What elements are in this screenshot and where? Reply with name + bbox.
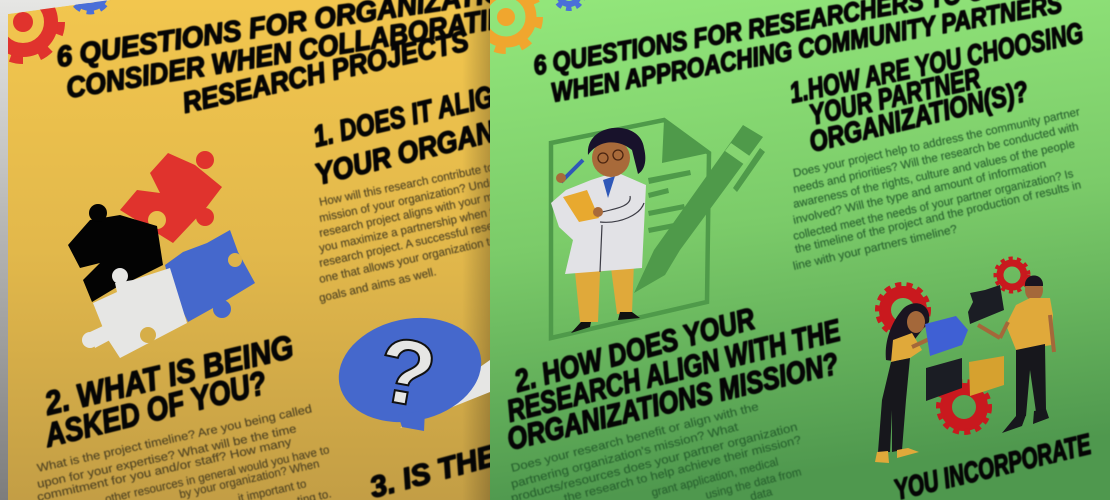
icon: blue gear xyxy=(71,0,109,11)
woman xyxy=(875,303,938,463)
text block: question 2: grant application, medical xyxy=(650,456,780,499)
heading: question 1 xyxy=(314,85,490,186)
puzzle: blue xyxy=(925,316,968,356)
text block: question 1 xyxy=(318,164,490,304)
text block: question 1: one that allows your organization to meet its own xyxy=(318,220,563,286)
puzzle piece: black xyxy=(68,204,163,302)
text block: question 1: collected meet the needs of your partner organization? Is xyxy=(792,168,1075,243)
illustration: people with gears and puzzle pieces xyxy=(875,259,1054,463)
icon: blue gear xyxy=(556,0,582,7)
text block: question 1: research project aligns with your mission, and how xyxy=(318,175,573,240)
heading: question 2: 2. HOW DOES YOUR xyxy=(510,301,759,399)
panel: researchers poster xyxy=(473,0,1110,500)
puzzle piece: red xyxy=(120,151,222,243)
illustration: scientist xyxy=(551,128,646,333)
heading: question 1: YOUR PARTNER xyxy=(807,63,983,132)
heading: question 2: RESEARCH ALIGN WITH THE xyxy=(503,312,845,429)
puzzle piece: blue xyxy=(158,230,255,322)
pencil xyxy=(561,160,583,182)
text block: question 1: needs and priorities? Will the research be conducted with xyxy=(792,121,1080,196)
text block: question 1: awareness of the rights, culture and values of the people xyxy=(792,138,1076,211)
text block: question 2: partnering organization's mission? What xyxy=(510,421,740,491)
puzzle: black lower xyxy=(926,358,962,401)
gear: bottom xyxy=(939,382,989,432)
heading: question 2: 2. WHAT IS BEING xyxy=(40,328,297,422)
icon: speech bubble with question mark xyxy=(338,318,490,431)
writing hand xyxy=(593,207,603,217)
gear: left xyxy=(878,285,928,335)
text block: question 1: How will this research contribute to the goals and xyxy=(318,147,566,209)
text block: question 2: by your organization? When xyxy=(178,458,321,500)
puzzle piece: white xyxy=(82,268,187,358)
title: RESEARCH PROJECTS xyxy=(180,25,472,120)
icon: puzzle pieces xyxy=(68,151,255,358)
text block: question 1: Does your project help to address the community partner xyxy=(792,106,1081,180)
text block: question 1: involved? Will the type and amount of information xyxy=(792,158,1047,227)
head xyxy=(592,139,630,177)
text block: question 1: mission of your organization? Understand how this xyxy=(318,160,573,225)
text block: question 1 xyxy=(792,106,1082,273)
text block: question 2: Does your research benefit or align with the xyxy=(510,401,760,475)
heading: question 2: ASKED OF YOU? xyxy=(40,364,270,454)
coat seam xyxy=(600,196,644,272)
lab coat xyxy=(551,172,646,274)
heading: question 1: ORGANIZATION(S)? xyxy=(806,76,1032,159)
heading: question 1 xyxy=(787,17,1086,159)
text block: question 2 xyxy=(510,401,803,500)
heading: question 2: ORGANIZATIONS MISSION? xyxy=(504,346,842,457)
text block: question 1: research project. A successful research project is xyxy=(318,205,564,270)
puzzle: black top xyxy=(968,285,1004,324)
panel: organizations poster xyxy=(8,0,490,500)
heading: question 1: 1. DOES IT ALIGN WITH xyxy=(310,61,580,154)
shoes xyxy=(571,322,591,333)
gear: top xyxy=(996,259,1028,291)
icon: orange gear xyxy=(490,0,543,54)
text block: question 1: you maximize a partnership when taking on a xyxy=(318,195,547,255)
text block: question 1: the timeline of the project and the production of results in xyxy=(794,179,1082,256)
clipboard xyxy=(563,190,599,222)
icon: speech bubble with question mark: ? xyxy=(370,318,443,428)
heading: question 2 xyxy=(507,307,842,450)
man xyxy=(978,276,1054,433)
pants xyxy=(575,268,634,322)
hand xyxy=(556,173,566,183)
text block: question 1: line with your partners timeline? xyxy=(792,223,958,273)
text block: question 2: What is the project timeline? Are you being called xyxy=(36,403,313,475)
hair xyxy=(588,128,645,174)
heading: question 1: YOUR ORGANIZATION'S MISSION? xyxy=(312,51,756,192)
text block: question 2 xyxy=(36,403,333,500)
collar xyxy=(603,176,615,198)
glasses xyxy=(598,150,623,163)
icon: document and pen xyxy=(551,120,765,338)
text block: question 2: upon for your expertise? What will be the time xyxy=(36,423,298,491)
text block: question 1: goals and aims as well. xyxy=(318,266,438,305)
puzzle: orange xyxy=(969,356,1004,396)
icon: red gear xyxy=(8,8,65,64)
